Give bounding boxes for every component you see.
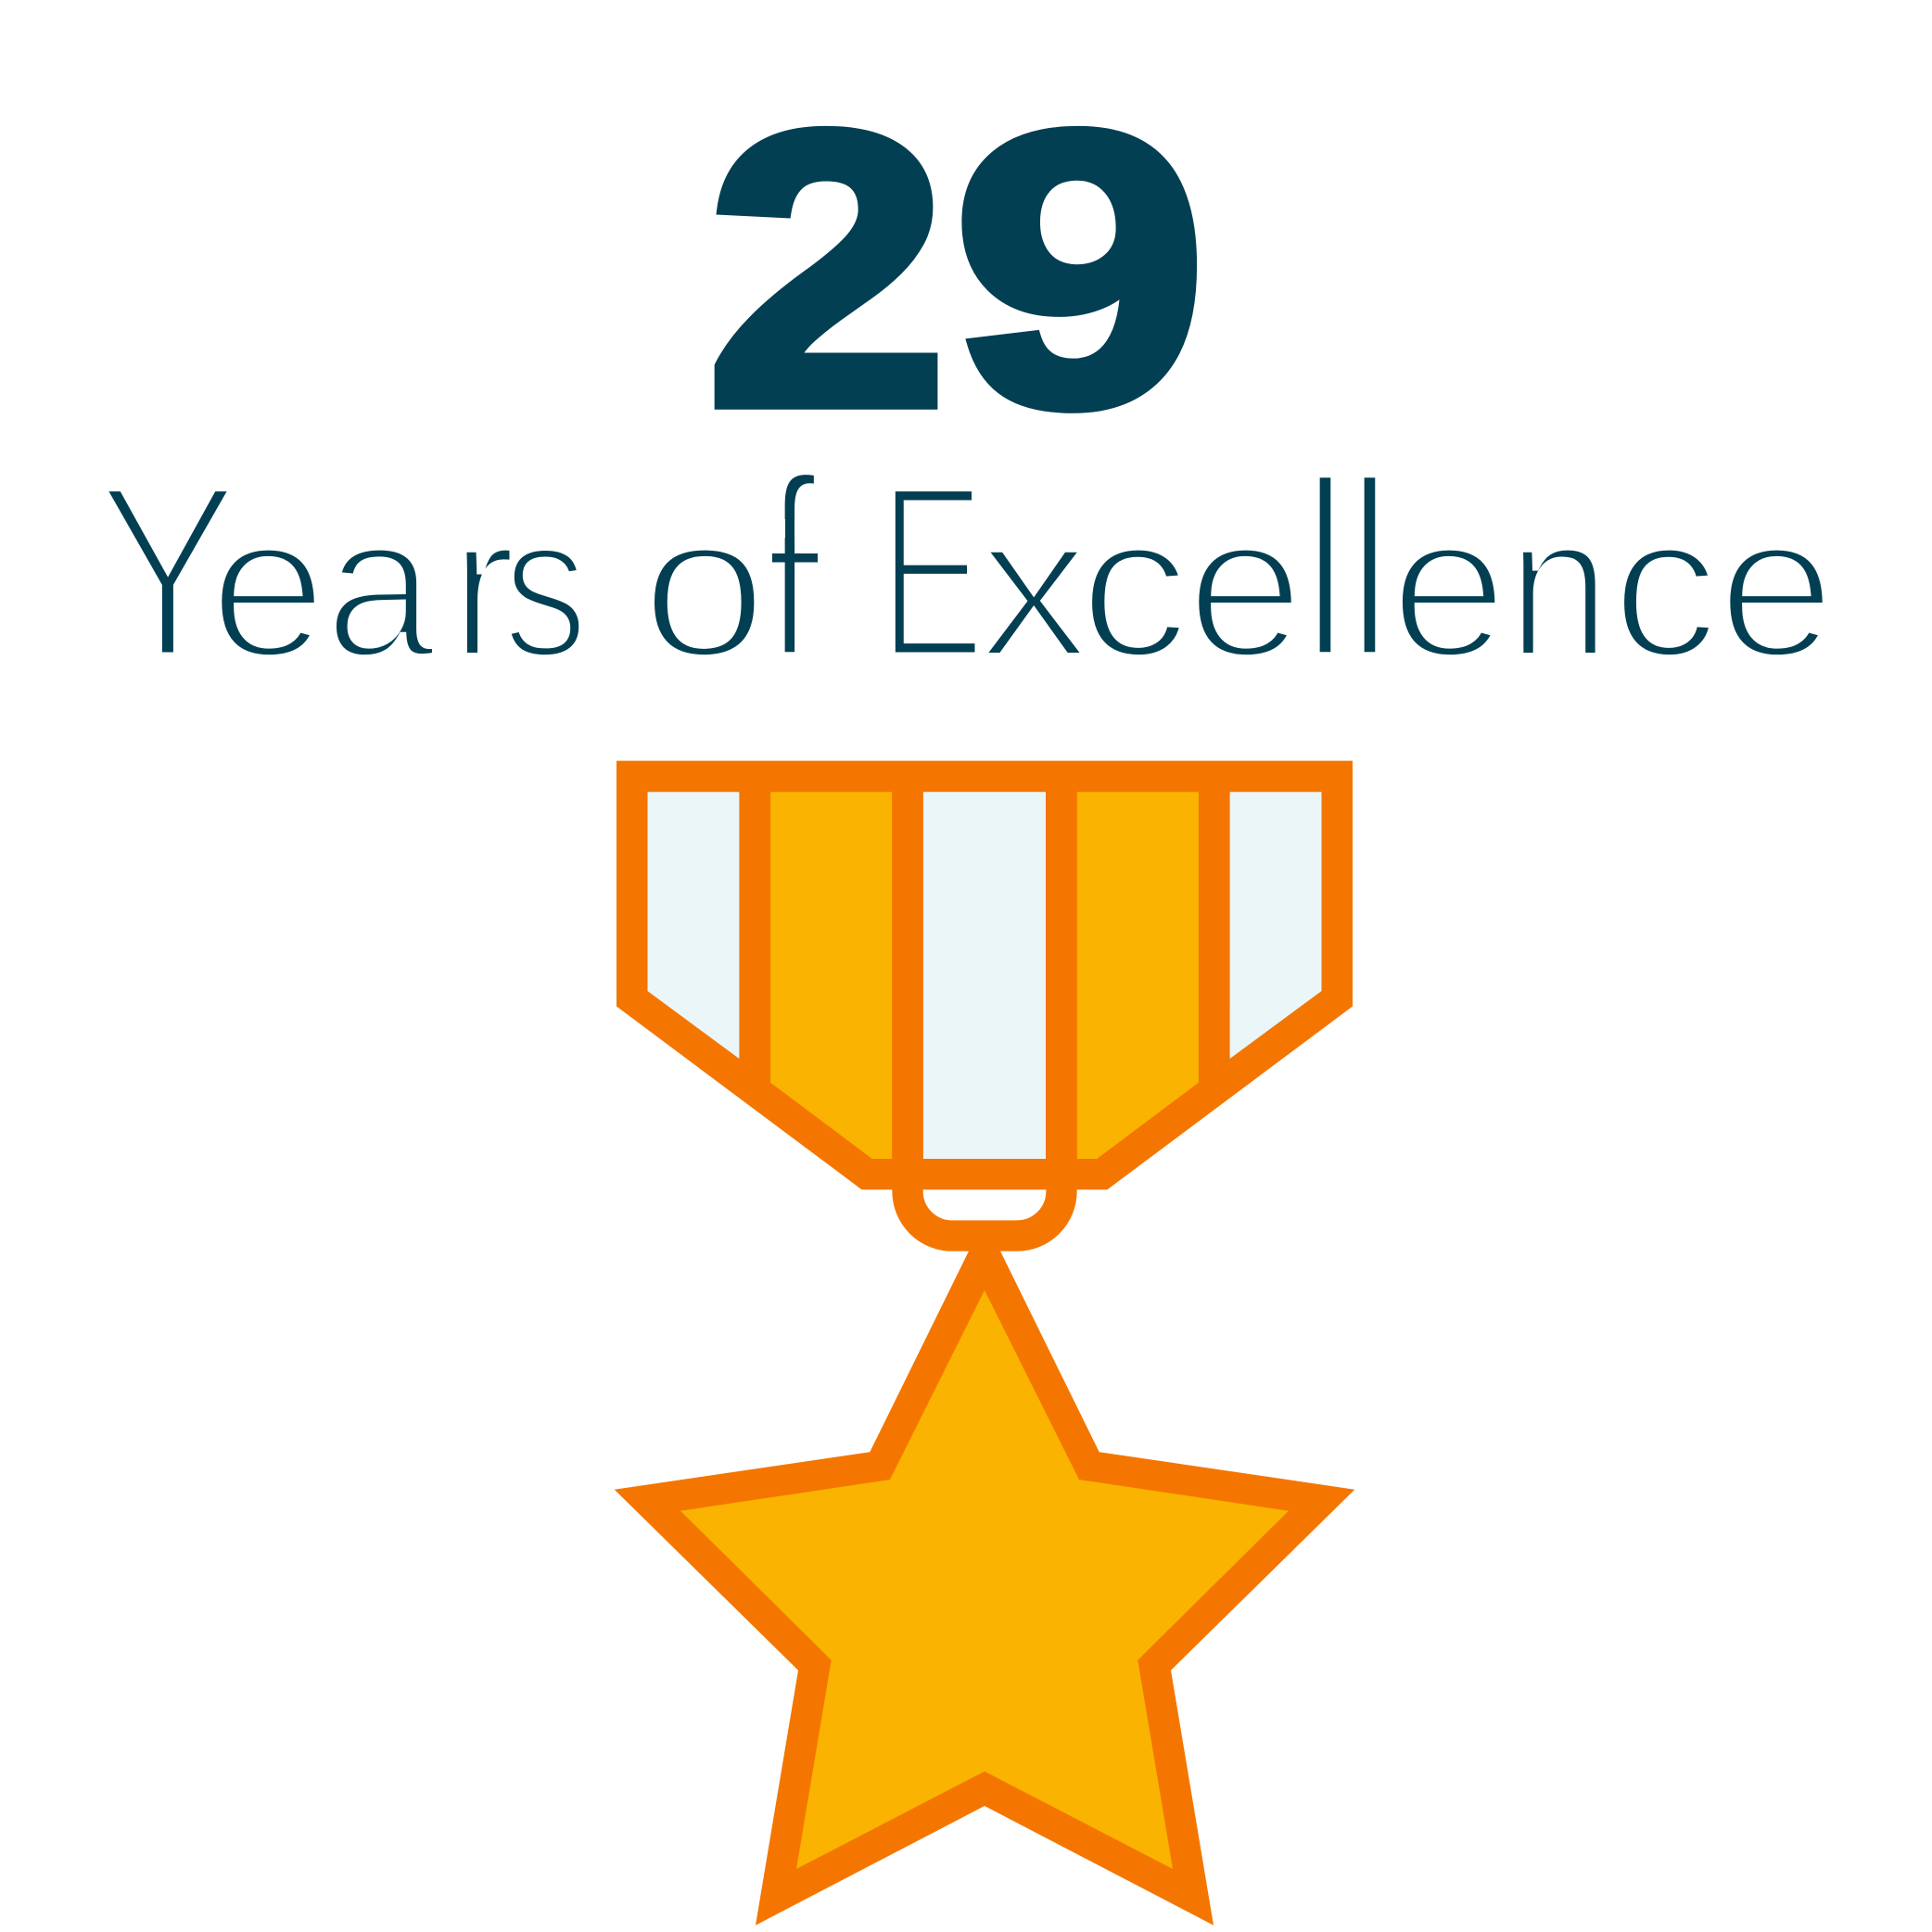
subtitle: Years of Excellence: c [1611,472,1719,700]
icon: medal [615,761,1354,1926]
subtitle: Years of Excellence: x [978,472,1089,700]
subtitle: Years of Excellence: s [502,472,588,700]
subtitle: Years of Excellence: l [1342,426,1396,712]
title: big number 29: 2 [706,53,947,486]
ribbon loop [908,1177,1061,1236]
subtitle: Years of Excellence: l [1298,426,1352,712]
subtitle: Years of Excellence: c [1079,472,1189,700]
subtitle: Years of Excellence: e [1390,472,1508,700]
title: big number 29: 9 [954,53,1206,486]
subtitle: Years of Excellence: r [450,472,516,700]
subtitle: Years of Excellence: o [641,472,768,700]
subtitle: Years of Excellence: Y [96,432,239,710]
star pendant [615,1219,1354,1926]
subtitle: Years of Excellence: e [1717,472,1836,700]
subtitle: Years of Excellence: e [1186,472,1304,700]
subtitle: Years of Excellence [96,423,1836,712]
subtitle: Years of Excellence: f [765,423,818,711]
subtitle: Years of Excellence: E [879,432,985,710]
subtitle: Years of Excellence: e [209,472,327,700]
subtitle: Years of Excellence: n [1507,472,1610,700]
ribbon [616,761,1353,1189]
subtitle: Years of Excellence: a [324,472,437,700]
